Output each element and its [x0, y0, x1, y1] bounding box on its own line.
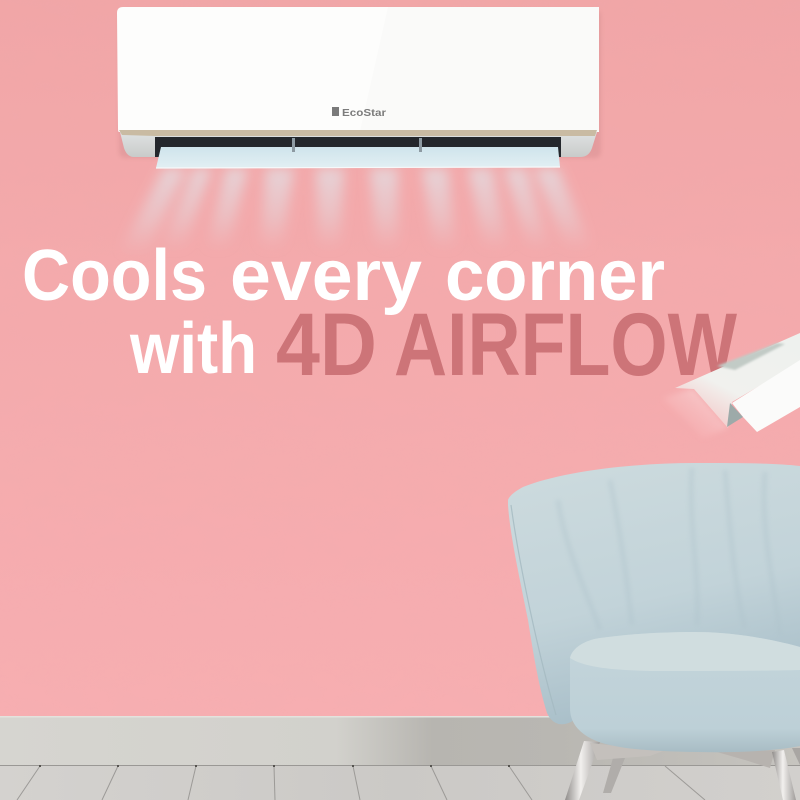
air conditioner unit [117, 7, 601, 168]
plane upper wing [675, 333, 800, 428]
skirting board [0, 716, 800, 765]
vent flap [156, 147, 560, 168]
plane wing shadow [717, 343, 785, 370]
headline line 1: corner [445, 236, 665, 316]
chair seat [570, 632, 800, 752]
headline line 2: 4D AIRFLOW [276, 294, 737, 394]
AC white front panel [117, 7, 599, 132]
icon: paper plane [663, 333, 800, 438]
headline line 1: Cools [22, 236, 207, 316]
airflow streams [118, 168, 592, 255]
louver hinges [292, 138, 422, 152]
headline line 2: 4D AIRFLOW: AIRFLOW [394, 294, 737, 394]
wooden floor [0, 765, 800, 800]
chair back pleats [558, 468, 780, 635]
plane motion trail [663, 388, 728, 438]
dark vent opening [155, 137, 561, 157]
chair back [508, 463, 800, 724]
AC shadow [119, 10, 601, 158]
EcoStar logo: EcoStar [342, 107, 386, 119]
seat top cushion [570, 632, 800, 671]
chair legs [565, 741, 800, 800]
headline line 1: every [230, 236, 422, 316]
armchair [508, 463, 800, 800]
gold trim [119, 130, 597, 136]
plane fold [727, 403, 743, 427]
chair back edge seam [511, 505, 556, 715]
headline line 2: 4D AIRFLOW: 4D [276, 294, 377, 394]
plane lower wing [732, 360, 800, 432]
AC lower end caps [120, 132, 597, 157]
headline line 2: with: with [129, 309, 257, 389]
headline line 1 [22, 236, 665, 316]
